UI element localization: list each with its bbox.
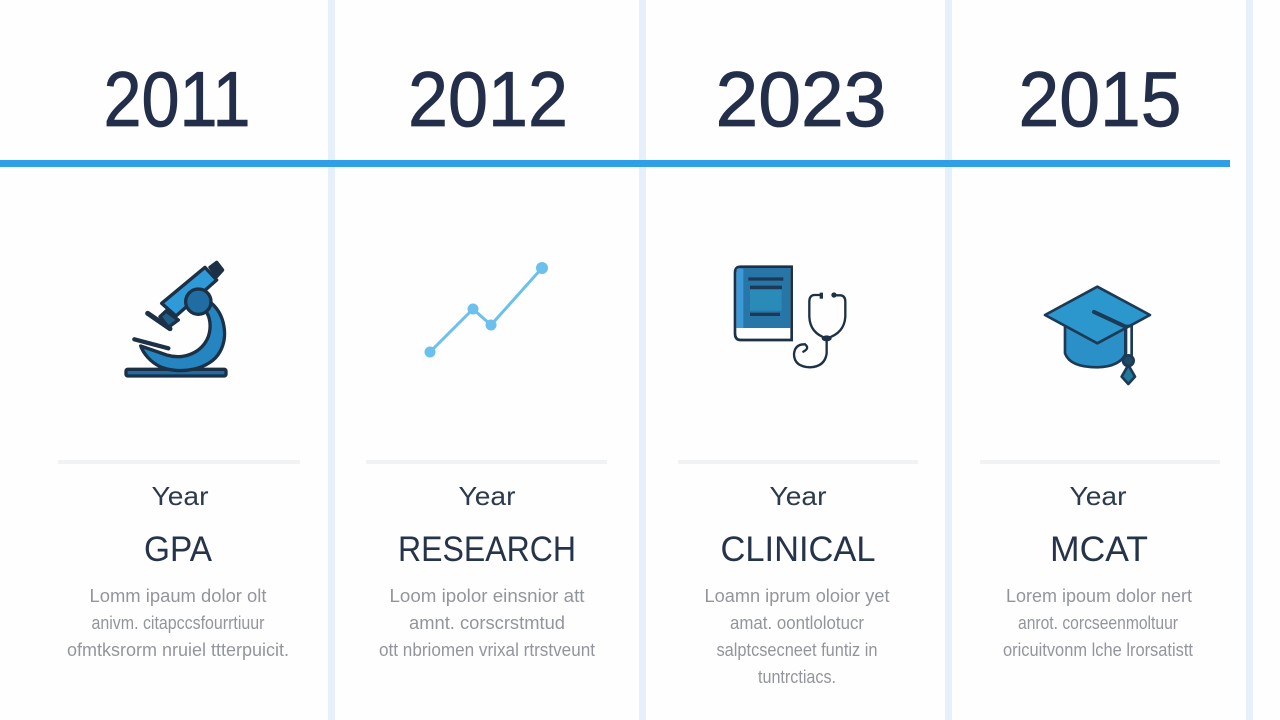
description: Loamn iprum oloior yet xyxy=(704,586,890,606)
panel: 2012 Research xyxy=(379,55,595,660)
panel: 2011 GPA xyxy=(67,55,289,660)
year 2015: 2015 xyxy=(1018,55,1182,143)
description: amnt. corscrstmtud xyxy=(409,613,565,633)
icon: graduation cap xyxy=(1045,287,1150,384)
description: Lorem ipoum dolor nert xyxy=(1006,586,1192,606)
label: Year: Year xyxy=(152,481,209,511)
description: amat. oontlolotucr xyxy=(730,613,864,633)
description: salptcsecneet funtiz in xyxy=(716,640,878,660)
description xyxy=(1003,586,1193,660)
description: Loom ipolor einsnior att xyxy=(390,586,584,606)
timeline line xyxy=(0,160,1230,167)
description: anivm. citapccsfourrtiuur xyxy=(92,613,264,633)
heading: GPA: GPA xyxy=(144,530,213,569)
heading: MCAT: MCAT xyxy=(1050,530,1148,569)
description: anrot. corcseenmoltuur xyxy=(1018,613,1178,633)
year 2011: 2011 xyxy=(104,55,250,143)
year 2023: 2023 xyxy=(716,55,886,143)
description: ott nbriomen vrixal rtrstveunt xyxy=(379,640,595,660)
description xyxy=(67,586,289,660)
icon: line chart xyxy=(424,262,548,358)
heading: CLINICAL: CLINICAL xyxy=(720,530,876,569)
panel: 2023 Clinical xyxy=(704,55,890,687)
icon: microscope xyxy=(126,262,226,376)
heading: RESEARCH: RESEARCH xyxy=(398,530,576,569)
description xyxy=(704,586,890,687)
label: Year: Year xyxy=(770,481,827,511)
year 2012: 2012 xyxy=(408,55,568,143)
description: tuntrctiacs. xyxy=(758,667,836,687)
panel: 2015 MCAT xyxy=(1003,55,1193,660)
description: Lomm ipaum dolor olt xyxy=(90,586,266,606)
label: Year: Year xyxy=(1070,481,1127,511)
icon: book and stethoscope xyxy=(735,267,845,367)
description: ofmtksrorm nruiel ttterpuicit. xyxy=(67,640,289,660)
description: oricuitvonm lche lrorsatistt xyxy=(1003,640,1193,660)
label: Year: Year xyxy=(458,481,516,511)
description xyxy=(379,586,595,660)
